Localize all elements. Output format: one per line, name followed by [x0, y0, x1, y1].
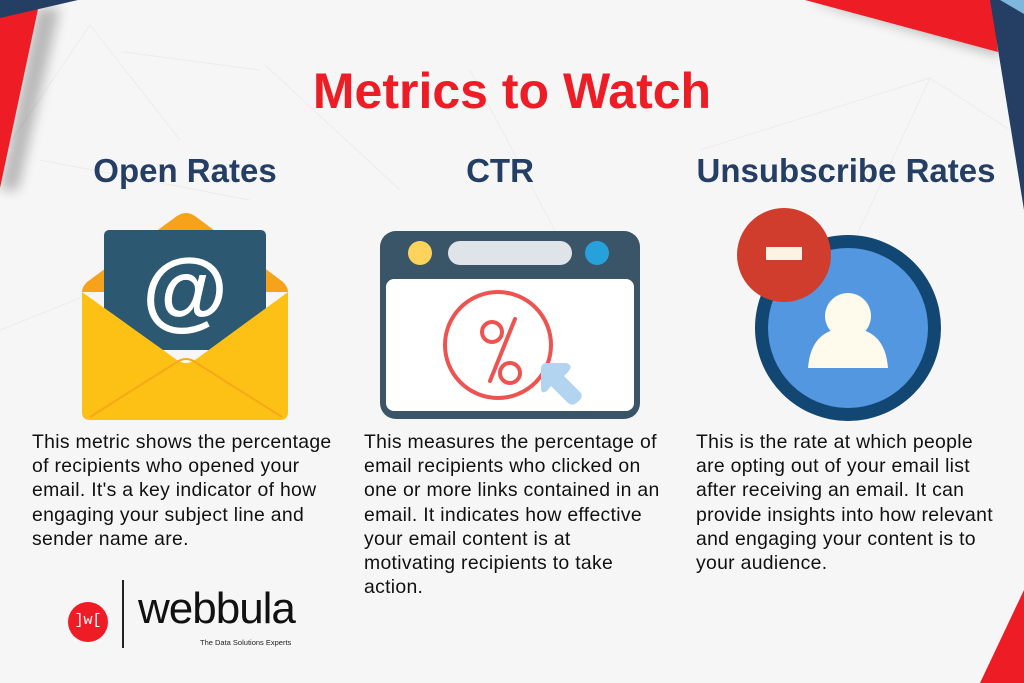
logo mark — [68, 602, 108, 642]
logo mark: ]w[ — [74, 612, 102, 629]
icon: browser with percent — [380, 231, 640, 419]
icon: envelope: @ — [142, 240, 228, 339]
text: CTR description: your email content is at — [364, 528, 571, 550]
text: CTR description — [364, 431, 660, 598]
logo text: webbula — [138, 584, 295, 633]
text: unsubscribe description: This is the rate at which people are opting out of your email list after receiving an email. It can provide insights into how relevant and engaging your content is to your audience. — [696, 431, 993, 574]
text: CTR description: action. — [364, 576, 423, 598]
title: Metrics to Watch — [313, 63, 711, 119]
heading: CTR: CTR — [466, 152, 534, 189]
text: CTR description: email recipients who clicked on — [364, 455, 641, 477]
text: open rates description: This metric shows the percentage of recipients who opened your email. It's a key indicator of how engaging your subject line and sender name are. — [32, 431, 332, 550]
logo: webbula — [68, 580, 296, 648]
heading: unsubscribe rates: Unsubscribe Rates — [697, 152, 995, 189]
heading: open rates: Open Rates — [93, 152, 277, 189]
text: CTR description: This measures the percentage of — [364, 431, 657, 453]
text: CTR description: motivating recipients to take — [364, 552, 613, 574]
icon: user with minus — [737, 208, 941, 421]
logo: webbula: The Data Solutions Experts — [200, 638, 291, 647]
icon: envelope — [82, 213, 288, 420]
text: CTR description: one or more links contained in an — [364, 479, 660, 501]
text: CTR description: email. It indicates how effective — [364, 504, 642, 526]
